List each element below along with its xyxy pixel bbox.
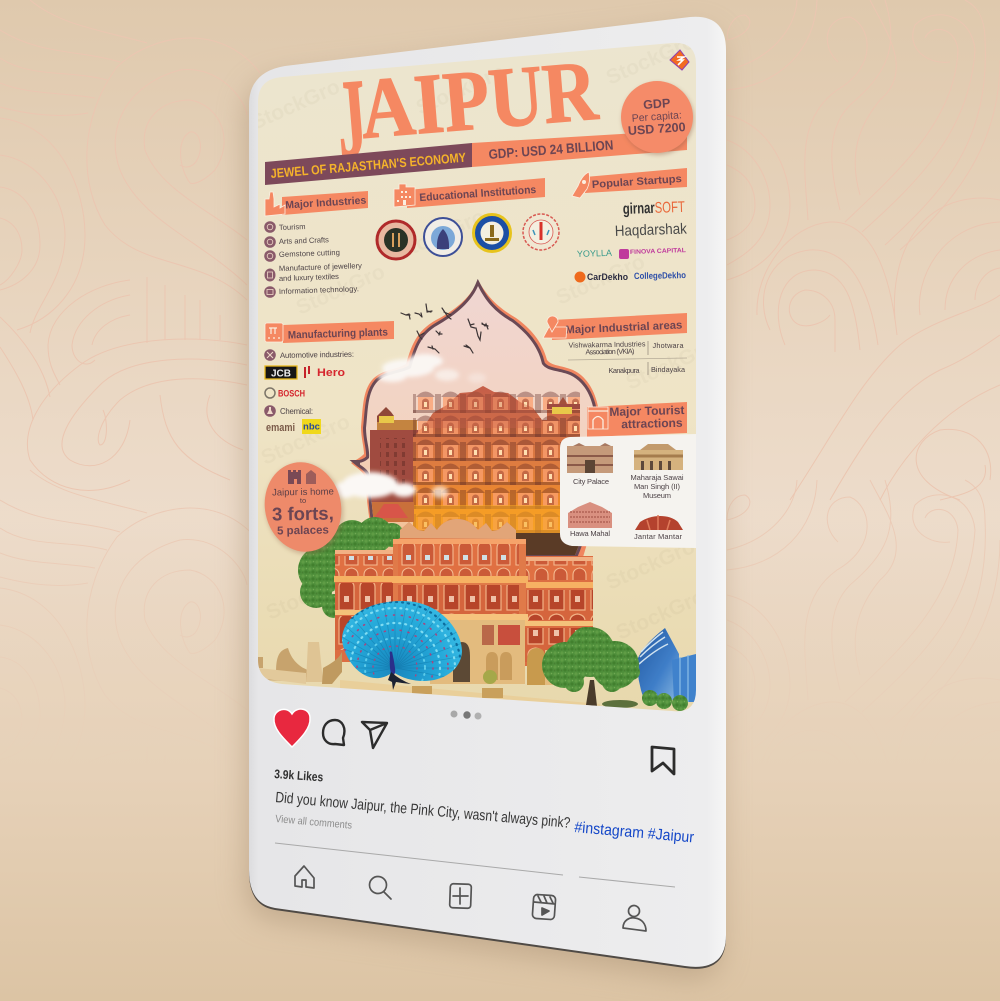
- areas list: Association (VKIA): [585, 347, 635, 356]
- likes count: 3.9k Likes: [274, 767, 324, 784]
- watermarks: StockGro: [623, 335, 718, 395]
- Hawa Mahal palace: [370, 386, 583, 563]
- watermarks: StockGro: [393, 205, 488, 265]
- logo: emami: emami: [266, 422, 295, 434]
- Jantar Mantar: [258, 642, 342, 684]
- watermarks: StockGro: [603, 30, 698, 90]
- icon: comment: [323, 720, 344, 745]
- right tree: [542, 627, 640, 708]
- icon: fort and palace: [288, 470, 316, 484]
- heading: educational institutions: [407, 178, 545, 208]
- automotive label: Automotive industries:: [280, 350, 354, 360]
- birds: [401, 304, 488, 353]
- heading: educational institutions: Educational Institutions: [419, 184, 537, 204]
- panel: major tourist attractions: [560, 402, 696, 548]
- callout: forts and palaces: Jaipur is home: [272, 486, 334, 499]
- icon: reels: [532, 894, 556, 920]
- chemical label: Chemical:: [280, 407, 313, 416]
- watermarks: StockGro: [603, 535, 698, 595]
- logo: Finova Capital: FINOVA CAPITAL: [630, 247, 686, 256]
- City Palace building: [334, 519, 600, 715]
- GDP callout: Per capita:: [631, 109, 682, 125]
- logo: JCB: JCB: [271, 368, 291, 380]
- industries list: Gemstone cutting: [279, 248, 340, 259]
- left tree: [298, 517, 404, 618]
- icon: search: [370, 876, 391, 899]
- icon: home: [295, 866, 314, 888]
- icon: factory: [265, 192, 285, 216]
- industries list: Arts and Crafts: [279, 235, 329, 246]
- watermarks: [248, 30, 718, 645]
- areas list: Jhotwara: [652, 341, 684, 350]
- callout: forts and palaces: 3 forts,: [272, 502, 334, 525]
- hashtags: #instagram #Jaipur: [574, 819, 695, 846]
- attraction: museum: [630, 444, 684, 500]
- ground floor: [430, 620, 525, 684]
- watermarks: StockGro: [553, 250, 648, 310]
- icon: create: [450, 884, 471, 908]
- heading: major industrial areas: [552, 313, 687, 340]
- title: J: [332, 57, 371, 182]
- areas list: Vishwakarma Industries: [568, 339, 646, 350]
- university seals: [377, 214, 559, 259]
- left wing: [335, 554, 393, 662]
- icon: bookmark: [652, 747, 674, 774]
- peacock: [342, 601, 462, 690]
- industries list: Information technology.: [279, 284, 359, 296]
- watermarks: StockGro: [248, 75, 343, 135]
- watermarks: StockGro: [413, 60, 508, 120]
- subtitle band: JEWEL OF RAJASTHAN'S ECONOMY: [270, 150, 467, 181]
- watermarks: StockGro: [613, 585, 708, 645]
- infographic poster: [258, 43, 696, 712]
- heading: major industrial areas: Major Industrial areas: [565, 319, 683, 337]
- arch frame: [351, 280, 601, 560]
- GDP callout: [621, 81, 694, 155]
- icon: rocket: [572, 172, 590, 198]
- logo: Bosch: BOSCH: [278, 388, 305, 400]
- areas list: Kanakpura: [608, 366, 640, 375]
- view comments: View all comments: [275, 813, 352, 832]
- carousel dots: [450, 710, 482, 720]
- callout: forts and palaces: [256, 455, 352, 562]
- logo: Haqdarshak: Haqdarshak: [615, 220, 688, 240]
- heading: major tourist attractions: attractions: [621, 416, 683, 431]
- clouds: [333, 354, 486, 498]
- heading: manufacturing plants: Manufacturing plants: [288, 326, 388, 342]
- areas list: [568, 339, 687, 375]
- icon: plant: [265, 323, 283, 342]
- attraction: museum: Maharaja Sawai: [630, 473, 684, 482]
- logo: Hero: Hero: [317, 367, 345, 379]
- subtitle band: [265, 130, 687, 185]
- glass towers: [637, 628, 696, 711]
- courtyard: [340, 680, 600, 706]
- industries list: [264, 221, 362, 298]
- icon: heart: [274, 709, 310, 747]
- attraction: Hawa Mahal: Hawa Mahal: [570, 529, 610, 538]
- attraction: City Palace: City Palace: [573, 477, 609, 486]
- watermarks: StockGro: [263, 565, 358, 625]
- subtitle band: GDP: USD 24 BILLION: [488, 137, 614, 162]
- panel: popular startups: [572, 168, 688, 283]
- callout: forts and palaces: to: [300, 496, 306, 505]
- heading: popular startups: Popular Startups: [592, 173, 682, 191]
- icon: map pin: [543, 316, 567, 338]
- attraction: museum: Man Singh (II): [634, 482, 680, 491]
- heading: major tourist attractions: Major Tourist: [609, 403, 685, 419]
- logo: girnarSOFT: girnarSOFT: [623, 199, 685, 218]
- bottom navigation icons: [295, 866, 646, 931]
- logo: nbc: nbc: [303, 422, 320, 432]
- title: AIPUR: [357, 43, 601, 157]
- nav bar divider: [275, 843, 675, 887]
- logo: CarDekho: CarDekho: [587, 272, 628, 283]
- startup logos: [574, 199, 688, 283]
- caption: Did you know Jaipur, the Pink City, wasn't always pink?: [275, 789, 571, 832]
- icon: gate: [588, 407, 608, 429]
- panel: major industrial areas: [543, 313, 687, 375]
- panel: educational institutions: [377, 178, 559, 259]
- right wing: [522, 556, 593, 666]
- icon: profile: [623, 906, 646, 931]
- GDP callout: GDP: [643, 96, 671, 112]
- watermarks: StockGro: [258, 410, 353, 470]
- panel: manufacturing plants: [264, 321, 394, 434]
- GDP callout: USD 7200: [627, 120, 686, 138]
- areas list: Bindayaka: [651, 365, 686, 374]
- poster background: [258, 40, 696, 715]
- attraction: Jantar Mantar: Jantar Mantar: [634, 532, 682, 541]
- industries list: and luxury textiles: [279, 272, 339, 283]
- arch window with Hawa Mahal: [333, 280, 601, 563]
- industries list: Tourism: [279, 222, 306, 232]
- heading: major industries: Major Industries: [285, 195, 367, 211]
- icon: school building: [394, 184, 415, 207]
- attraction: museum: Museum: [643, 491, 671, 500]
- callout: forts and palaces: 5 palaces: [277, 525, 329, 537]
- phone card: [245, 17, 726, 979]
- logo: Yoylla: YOYLLA: [577, 248, 612, 259]
- attractions card: [560, 434, 696, 548]
- icon: send: [362, 722, 387, 748]
- heading: major tourist attractions: [587, 402, 687, 437]
- brand logo: [670, 50, 689, 70]
- central block: [393, 519, 526, 618]
- panel: major industries: [264, 191, 368, 298]
- logo: CollegeDekho: CollegeDekho: [634, 270, 686, 281]
- industries list: Manufacture of jewellery: [279, 261, 362, 273]
- watermarks: StockGro: [293, 260, 388, 320]
